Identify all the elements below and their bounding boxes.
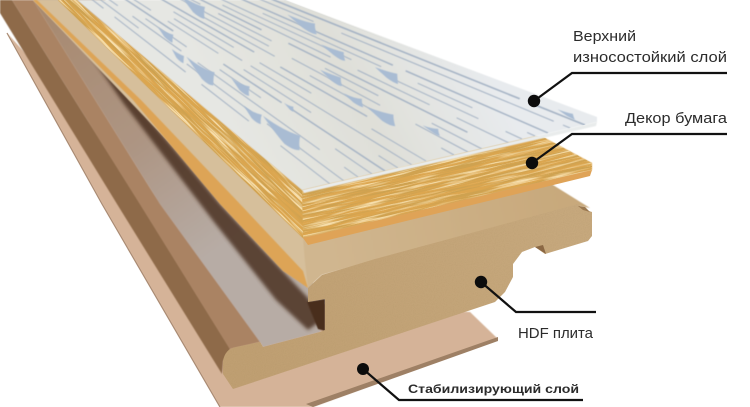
groove floor: [33, 0, 325, 347]
light tongue top: [12, 0, 260, 349]
callout: HDF board: HDF плита: [518, 325, 594, 342]
callout: top wear layer: [528, 28, 727, 107]
label: top wear layer: Верхний: [573, 28, 636, 45]
callout: stabilizing layer: [357, 363, 583, 400]
callout: stabilizing layer: Стабилизирующий слой: [408, 382, 579, 396]
oak grain, front part: [302, 136, 592, 237]
callout: top wear layer: износостойкий слой: [573, 49, 727, 66]
orange paper edge: [303, 170, 592, 245]
tongue notch: [535, 245, 546, 254]
beige chamfer band beside oak layer: [33, 0, 308, 288]
wood pattern on wear layer: [92, 0, 586, 184]
callout: HDF board: [475, 276, 596, 342]
decor paper layer: [58, 0, 593, 245]
oak grain, side part: [58, 0, 303, 238]
orange board edge: [33, 0, 308, 288]
blue grain streaks: [155, 0, 577, 153]
board front face: [223, 204, 592, 389]
groove shadow: [60, 12, 322, 330]
stabilizing layer: [7, 33, 498, 407]
dark tongue side: [0, 0, 230, 374]
tongue and groove side profile: [0, 0, 325, 374]
top wear layer: [77, 0, 597, 194]
HDF board: [100, 0, 592, 389]
board top face: [100, 0, 590, 288]
callout: decor paper: Декор бумага: [625, 110, 728, 127]
callout: decor paper: [526, 110, 728, 169]
